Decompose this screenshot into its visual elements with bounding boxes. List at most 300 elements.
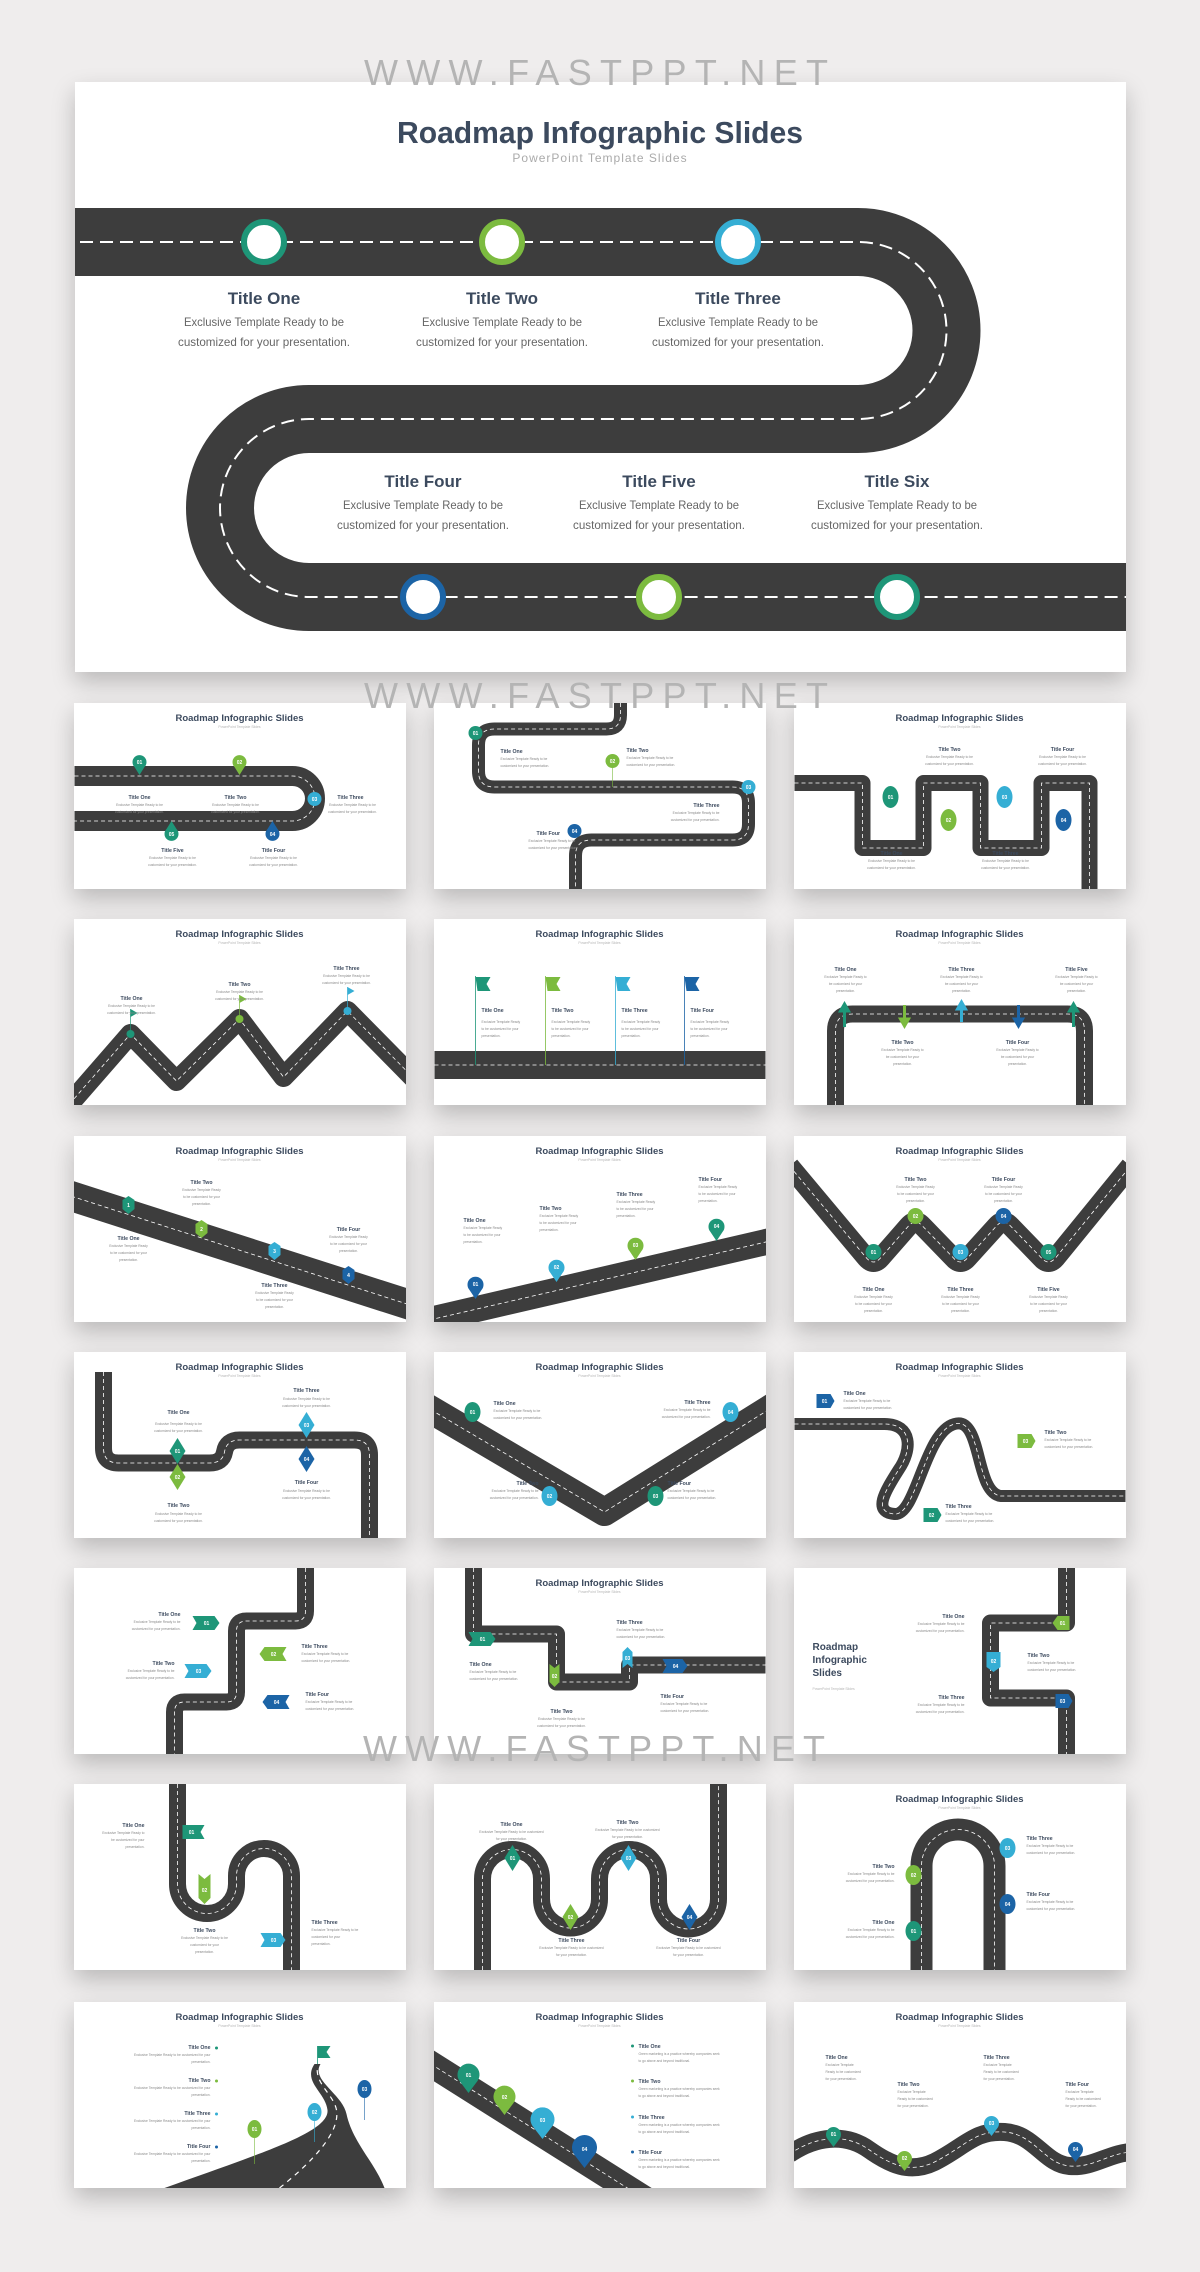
texts: Title Two	[1028, 1653, 1050, 1659]
texts: Exclusive Template Ready	[690, 1020, 729, 1024]
pins: 03	[633, 1243, 638, 1249]
texts: Title Four	[992, 1177, 1015, 1183]
diamonds	[504, 1845, 698, 1930]
texts: Exclusive Template Ready to be	[538, 1717, 585, 1721]
tags: 03	[196, 1669, 201, 1675]
texts: Exclusive Template	[984, 2063, 1012, 2067]
texts: Title Three	[184, 2111, 211, 2117]
road	[836, 1014, 1084, 1105]
slide 18: hairpin road: Roadmap Infographic Slides	[896, 1794, 1024, 1805]
road	[178, 1784, 292, 1970]
texts: Title Two	[872, 1864, 894, 1870]
texts: Exclusive Template Ready to be	[134, 1620, 181, 1624]
road	[174, 1568, 306, 1754]
slide 7: descending diagonal road: PowerPoint Template Slides	[218, 1158, 261, 1162]
texts: Title Three	[312, 1920, 338, 1926]
texts: presentation.	[119, 1258, 138, 1262]
texts: customized for your presentation.	[154, 1429, 203, 1433]
texts: Title Four	[677, 1938, 700, 1944]
texts: Exclusive Template Ready	[329, 1235, 368, 1239]
slide 14: angular road with tags: Roadmap Infographic Slides	[536, 1578, 664, 1589]
texts: customized for your presentation.	[662, 1415, 711, 1419]
slide 1: U-turn road: Roadmap Infographic Slides	[176, 713, 304, 724]
text blocks top row: Exclusive Template Ready to be	[422, 315, 582, 329]
texts: Title Three	[616, 1192, 643, 1198]
texts: Title Four	[306, 1692, 329, 1698]
slide 3: rectilinear road: PowerPoint Template Slides	[938, 725, 981, 729]
texts: Exclusive Template Ready to be	[323, 974, 370, 978]
texts: Exclusive Template Ready to be	[1028, 1661, 1075, 1665]
texts: presentation.	[864, 1309, 883, 1313]
texts: to be customized for your	[985, 1192, 1023, 1196]
texts: customized for your presentation.	[925, 762, 974, 766]
pins: 02	[554, 1265, 559, 1271]
slide 7: descending diagonal road	[74, 1136, 406, 1322]
texts: Exclusive Template Ready to be	[494, 1409, 541, 1413]
texts: Title Two	[904, 1177, 926, 1183]
texts: Title Three	[1026, 1836, 1053, 1842]
texts: Title Three	[558, 1938, 585, 1944]
texts: Title Three	[684, 1400, 711, 1406]
texts: Exclusive Template Ready to be customized	[656, 1946, 721, 1950]
texts: to go above and beyond traditional.	[638, 2059, 690, 2063]
texts: presentation.	[893, 1062, 912, 1066]
markers: 01	[470, 1410, 475, 1416]
tags: 02	[991, 1659, 996, 1665]
texts: be customized for your	[1001, 1055, 1035, 1059]
texts: presentation.	[1067, 989, 1086, 993]
road	[70, 1011, 414, 1104]
slide 5: straight road with flags: Roadmap Infographic Slides	[536, 929, 664, 940]
texts	[107, 966, 371, 1015]
texts: be customized for your	[945, 982, 979, 986]
slide 21: wavy horizontal road: PowerPoint Template Slides	[938, 2024, 981, 2028]
main title: Roadmap Infographic Slides	[397, 115, 803, 150]
texts: presentation.	[836, 989, 855, 993]
markers: 02	[913, 1214, 918, 1220]
texts: Title Five	[1037, 1287, 1060, 1293]
tags: 04	[274, 1700, 279, 1706]
texts: Ready to be customized	[898, 2097, 933, 2101]
slide 5: straight road with flags	[434, 919, 766, 1105]
tags: 01	[1060, 1621, 1065, 1627]
texts	[844, 1391, 1093, 1523]
texts: Title Four	[187, 2144, 210, 2150]
road	[424, 2060, 650, 2202]
pins: 02	[902, 2156, 907, 2162]
road	[478, 703, 748, 889]
texts: to be customized for your	[616, 1207, 654, 1211]
texts: Exclusive Template Ready to be	[528, 839, 576, 843]
text blocks top row: customized for your presentation.	[652, 335, 824, 349]
texts: Exclusive Template Ready to	[940, 975, 983, 979]
slide 20: diagonal road with big pins: PowerPoint Template Slides	[578, 2024, 621, 2028]
tags	[468, 1632, 688, 1687]
slide 3: rectilinear road: Roadmap Infographic Slides	[896, 713, 1024, 724]
road	[794, 1423, 1126, 1514]
texts: Title Three	[622, 1008, 648, 1014]
pins: 04	[582, 2147, 587, 2153]
pins: 04	[1073, 2147, 1078, 2153]
texts	[867, 747, 1087, 870]
road	[424, 1406, 774, 1512]
texts: presentation.	[1039, 1309, 1058, 1313]
markers: 03	[653, 1494, 658, 1500]
road	[482, 1784, 718, 1970]
main slide	[75, 82, 1126, 672]
text blocks bottom row: Exclusive Template Ready to be	[817, 498, 977, 512]
pins	[826, 2116, 1083, 2171]
texts: Exclusive Template Ready to	[1055, 975, 1098, 979]
texts: Exclusive Template Ready to be customized for your	[134, 2053, 211, 2057]
tags	[816, 1394, 1036, 1522]
texts: for your presentation.	[1066, 2104, 1097, 2108]
texts: Title One	[500, 1822, 523, 1828]
texts: Exclusive Template Ready to	[824, 975, 867, 979]
markers: 03	[1002, 795, 1007, 801]
texts: customized for your presentation.	[249, 863, 298, 867]
slide 9: W-shaped road	[794, 1136, 1126, 1322]
texts: Title One	[464, 1218, 486, 1224]
texts: Title Three	[616, 1620, 643, 1626]
texts: Exclusive Template Ready to be	[946, 1512, 993, 1516]
texts: Title Four	[337, 1227, 360, 1233]
texts: Exclusive Template Ready to be	[848, 1872, 895, 1876]
texts: customized for your presentation.	[302, 1659, 350, 1663]
pins: 02	[312, 2110, 317, 2116]
diamonds: 04	[687, 1915, 692, 1921]
texts: presentation.	[192, 1202, 211, 1206]
text blocks bottom row: customized for your presentation.	[811, 518, 983, 532]
slide 8: ascending road with pins: PowerPoint Template Slides	[578, 1158, 621, 1162]
texts: Exclusive Template Ready to be	[616, 1628, 664, 1632]
texts: customized for your presentation.	[668, 1496, 716, 1500]
texts	[490, 1400, 716, 1500]
slide 5: straight road with flags: PowerPoint Template Slides	[578, 941, 621, 945]
slide 4: zigzag road with flags: Roadmap Infographic Slides	[176, 929, 304, 940]
texts: Title Five	[161, 848, 184, 854]
texts: Exclusive Template Ready to be	[306, 1700, 353, 1704]
slide 20: diagonal road with big pins: Roadmap Infographic Slides	[536, 2012, 664, 2023]
slide 18: hairpin road: PowerPoint Template Slides	[938, 1806, 981, 1810]
texts: Title Two	[938, 747, 960, 753]
texts	[109, 1180, 368, 1309]
text blocks top row: customized for your presentation.	[416, 335, 588, 349]
texts: Title Two	[552, 1008, 574, 1014]
texts: Exclusive Template Ready to be	[312, 1928, 359, 1932]
markers	[464, 1402, 738, 1506]
texts: Title Four	[1066, 2082, 1089, 2088]
texts: to be customized for your	[464, 1233, 501, 1237]
flags	[126, 987, 354, 1038]
texts: presentation.	[698, 1199, 718, 1203]
markers: 01	[871, 1250, 876, 1256]
texts: to be customized for your	[256, 1298, 294, 1302]
texts	[479, 1820, 721, 1957]
texts: Exclusive Template Ready to be	[844, 1399, 891, 1403]
slide 8: ascending road with pins	[434, 1136, 766, 1322]
tags	[182, 1825, 286, 1947]
road	[922, 1830, 994, 1970]
texts: to be customized for your	[330, 1242, 368, 1246]
texts: to be customized for your	[698, 1192, 736, 1196]
tags: 02	[271, 1652, 276, 1658]
texts	[826, 2055, 1101, 2108]
text blocks top row	[178, 289, 824, 349]
slide 17: wavy vertical road with diamonds	[434, 1784, 766, 1970]
markers: 02	[610, 759, 615, 765]
texts: be customized for your	[829, 982, 863, 986]
texts: Title Four	[660, 1694, 684, 1700]
texts: customized for your presentation.	[867, 866, 916, 870]
diamonds: 01	[175, 1449, 180, 1455]
texts: Exclusive Template Ready	[255, 1291, 294, 1295]
text blocks bottom row: customized for your presentation.	[573, 518, 745, 532]
markers: 04	[1001, 1214, 1006, 1220]
texts: Exclusive Template Ready to be	[155, 1422, 202, 1426]
texts: customized for your presentation.	[916, 1629, 965, 1633]
markers: 04	[728, 1410, 733, 1416]
texts: customized for your presentation.	[500, 764, 549, 768]
texts: presentation.	[312, 1942, 331, 1946]
texts: Exclusive Template Ready to	[996, 1048, 1039, 1052]
texts	[824, 967, 1098, 1066]
texts: Exclusive Template Ready to be	[626, 756, 674, 760]
milestone circles	[244, 222, 917, 617]
texts: Exclusive Template Ready to	[881, 1048, 924, 1052]
texts: to be customized for your	[540, 1221, 577, 1225]
tags	[184, 1616, 290, 1709]
texts: to be customized for your	[622, 1027, 659, 1031]
texts	[102, 1823, 359, 1954]
pins: 01	[473, 1282, 478, 1288]
diamonds: 02	[175, 1475, 180, 1481]
texts	[126, 1612, 354, 1711]
slide 11: V road: PowerPoint Template Slides	[578, 1374, 621, 1378]
side title: Slides	[812, 1668, 842, 1679]
texts: for your presentation.	[556, 1953, 587, 1957]
markers: 04	[1061, 818, 1066, 824]
main title: PowerPoint Template Slides	[512, 151, 688, 165]
texts: Exclusive Template Ready to be	[329, 803, 376, 807]
markers	[882, 786, 1072, 831]
texts: Title Two	[638, 2079, 660, 2085]
texts: to be customized for your	[942, 1302, 980, 1306]
slide 1: U-turn road	[74, 703, 406, 889]
texts	[154, 1388, 331, 1523]
texts: Title Three	[938, 1695, 965, 1701]
texts: customized for your presentation.	[671, 818, 720, 822]
tags	[986, 1616, 1072, 1708]
texts: customized for your presentation.	[328, 810, 377, 814]
text blocks top row: Title One	[228, 289, 300, 308]
road	[794, 783, 1090, 889]
texts: customized for your presentation.	[1028, 1668, 1076, 1672]
slide 11: V road: Roadmap Infographic Slides	[536, 1362, 664, 1373]
road	[474, 1568, 766, 1682]
slide 8: ascending road with pins: Roadmap Infographic Slides	[536, 1146, 664, 1157]
texts: presentation.	[125, 1845, 145, 1849]
road	[990, 1568, 1066, 1754]
texts: Title One	[826, 2055, 848, 2061]
slide 10: stepped road with diamonds: Roadmap Infographic Slides	[176, 1362, 304, 1373]
texts: Exclusive Template Ready to be	[500, 757, 548, 761]
slide 18: hairpin road	[794, 1784, 1126, 1970]
texts: Green marketing is a practice whereby companies seek	[638, 2123, 720, 2127]
markers: 01	[473, 731, 478, 737]
texts: Title One	[167, 1410, 190, 1416]
markers	[906, 1838, 1016, 1941]
tags: 02	[202, 1888, 207, 1894]
slide 4: zigzag road with flags: PowerPoint Template Slides	[218, 941, 261, 945]
texts: Title Two	[892, 1040, 914, 1046]
texts: presentation.	[191, 2126, 211, 2130]
texts: Exclusive Template Ready	[854, 1295, 893, 1299]
texts: customized for your presentation.	[490, 1496, 539, 1500]
texts: customized for your presentation.	[916, 1710, 965, 1714]
texts: Title One	[500, 749, 523, 755]
texts: Exclusive Template Ready to be	[250, 856, 297, 860]
texts: presentation.	[191, 2159, 211, 2163]
markers: 01	[888, 795, 893, 801]
tags: 01	[822, 1399, 827, 1405]
texts: Exclusive Template Ready to be	[181, 1936, 228, 1940]
texts: Exclusive Template Ready	[552, 1020, 590, 1024]
texts: for your presentation.	[898, 2104, 929, 2108]
side title	[812, 1642, 867, 1691]
slide 16: S-bend road with tags	[74, 1784, 406, 1970]
texts: presentation.	[622, 1034, 641, 1038]
texts	[115, 795, 377, 867]
texts: for your presentation.	[496, 1837, 527, 1841]
road	[790, 1166, 1130, 1262]
texts: presentation.	[339, 1249, 358, 1253]
pins	[468, 1219, 724, 1299]
texts: Exclusive Template Ready to be	[212, 803, 259, 807]
texts: customized for your presentation.	[107, 1011, 156, 1015]
markers	[866, 1208, 1056, 1260]
texts: Title One	[158, 1612, 181, 1618]
markers: 03	[312, 797, 317, 803]
texts: Exclusive Template Ready to be	[673, 811, 720, 815]
texts: Exclusive Template Ready to be customized for your	[134, 2119, 211, 2123]
texts	[854, 1177, 1068, 1313]
slide 14: angular road with tags: PowerPoint Template Slides	[578, 1590, 621, 1594]
texts: Exclusive Template Ready to be	[926, 755, 973, 759]
texts: presentation.	[191, 2060, 211, 2064]
texts: Exclusive Template	[1066, 2090, 1094, 2094]
pins	[248, 2080, 372, 2164]
texts: Title Two	[1044, 1430, 1066, 1436]
texts: to be customized for your	[897, 1192, 935, 1196]
texts: to go above and beyond traditional.	[638, 2130, 690, 2134]
texts: Title Four	[638, 2150, 662, 2156]
texts: customized for your presentation.	[846, 1879, 895, 1883]
texts: Title One	[862, 1287, 885, 1293]
texts: customized for your presentation.	[211, 810, 260, 814]
texts: Title Four	[262, 848, 285, 854]
texts: Title Four	[698, 1177, 722, 1183]
flag	[318, 2046, 330, 2064]
text blocks top row: Title Two	[466, 289, 538, 308]
text blocks bottom row: Title Six	[865, 472, 930, 491]
pins: 01	[831, 2132, 836, 2138]
texts: Exclusive Template	[898, 2090, 926, 2094]
texts: Title Two	[516, 1481, 538, 1487]
texts: Exclusive Template Ready to be	[108, 1004, 155, 1008]
texts: Green marketing is a practice whereby companies seek	[638, 2052, 720, 2056]
markers: 02	[911, 1873, 916, 1879]
slide 20: diagonal road with big pins	[434, 2002, 766, 2188]
texts: Exclusive Template Ready to be	[660, 1702, 708, 1706]
texts: Exclusive Template Ready	[984, 1185, 1023, 1189]
texts: Exclusive Template	[826, 2063, 854, 2067]
texts: Exclusive Template Ready	[698, 1185, 737, 1189]
pins: 02	[502, 2095, 507, 2101]
texts: presentation.	[690, 1034, 710, 1038]
tags: 04	[673, 1664, 678, 1670]
slide 10: stepped road with diamonds	[74, 1352, 406, 1538]
texts: Exclusive Template Ready to be	[1026, 1900, 1074, 1904]
texts: Exclusive Template Ready	[540, 1214, 578, 1218]
road	[430, 1240, 774, 1320]
road	[434, 1051, 766, 1079]
texts: Exclusive Template Ready to be	[116, 803, 163, 807]
texts: Title Two	[188, 2078, 210, 2084]
texts: Title Four	[668, 1481, 691, 1487]
markers	[132, 755, 322, 841]
texts: Title One	[880, 851, 903, 857]
texts: Exclusive Template Ready to be	[982, 859, 1029, 863]
texts: customized for your presentation.	[282, 1404, 331, 1408]
texts	[916, 1614, 1076, 1714]
slide 15: side title with bracket road	[794, 1568, 1126, 1754]
texts: Title One	[188, 2045, 211, 2051]
texts: to be customized for your	[110, 1251, 148, 1255]
texts: Exclusive Template Ready	[482, 1020, 520, 1024]
texts: Title Three	[992, 851, 1019, 857]
texts: Title Three	[261, 1283, 288, 1289]
texts: be customized for your	[1060, 982, 1094, 986]
texts: Exclusive Template Ready	[109, 1244, 148, 1248]
texts: Title One	[120, 996, 143, 1002]
diamonds: 01	[510, 1856, 515, 1862]
texts: customized for your presentation.	[132, 1627, 181, 1631]
texts: customized for your presentation.	[1026, 1907, 1075, 1911]
texts: Title Three	[638, 2115, 665, 2121]
texts	[500, 748, 720, 850]
texts: Exclusive Template Ready to be	[283, 1489, 330, 1493]
texts: to go above and beyond traditional.	[638, 2094, 690, 2098]
markers: 01	[911, 1929, 916, 1935]
texts: customized for your	[190, 1943, 220, 1947]
texts: customized for your presentation.	[1044, 1445, 1093, 1449]
slide 9: W-shaped road: PowerPoint Template Slides	[938, 1158, 981, 1162]
texts: Title One	[638, 2044, 661, 2050]
tags: 03	[625, 1656, 630, 1662]
texts: customized for your presentation.	[494, 1416, 542, 1420]
texts	[464, 1177, 737, 1244]
texts: Title Four	[1051, 747, 1074, 753]
texts: customized for your	[312, 1935, 341, 1939]
texts: presentation.	[464, 1240, 483, 1244]
markers: 02	[547, 1494, 552, 1500]
tags: 03	[1023, 1439, 1028, 1445]
road	[64, 1194, 420, 1308]
pins: 01	[466, 2073, 471, 2079]
texts: Title Three	[984, 2055, 1010, 2061]
slide 19: perspective road with flag	[74, 2002, 406, 2188]
